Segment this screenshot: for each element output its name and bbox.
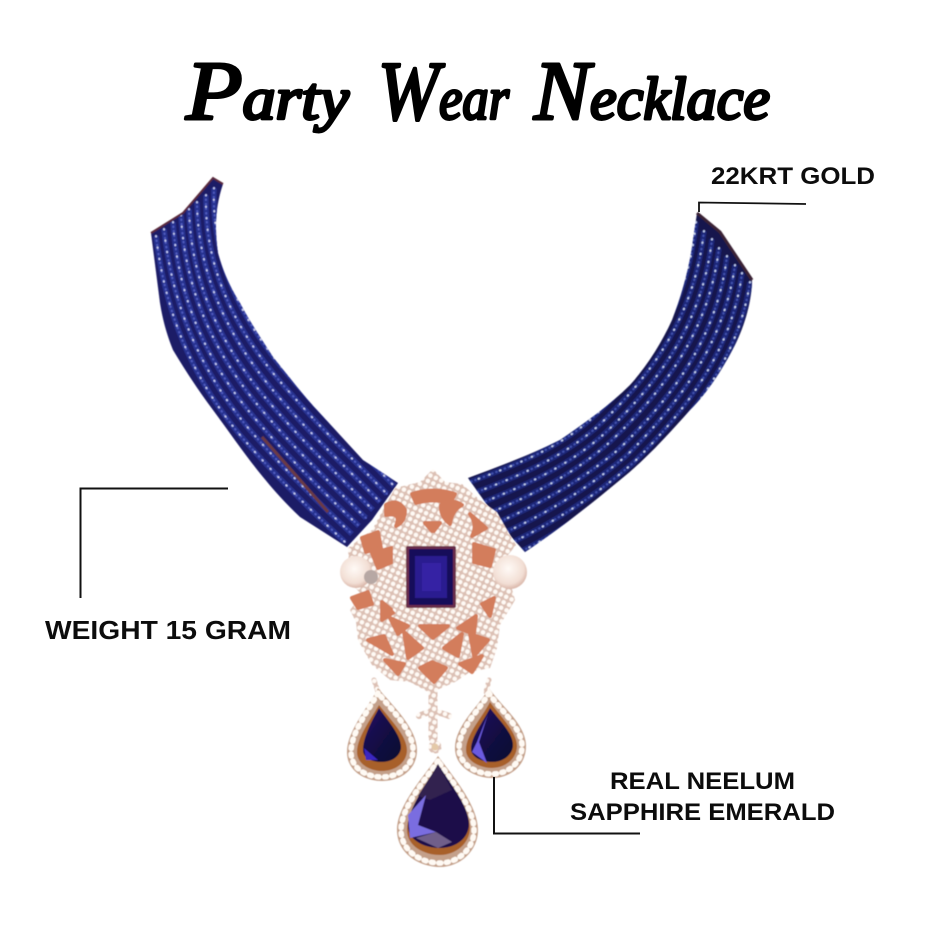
salmon openings in the filigree bbox=[352, 490, 494, 682]
left drop bbox=[347, 688, 417, 781]
callout: REAL NEELUM SAPPHIRE EMERALD bbox=[494, 768, 835, 834]
large drop bbox=[397, 756, 478, 867]
callout: WEIGHT 15 GRAM bbox=[45, 488, 291, 645]
title: Necklace bbox=[533, 45, 770, 138]
small connector bbox=[374, 680, 489, 752]
right bead strands bbox=[468, 213, 752, 552]
callout: 22KRT GOLD: 22KRT GOLD bbox=[711, 163, 875, 190]
centre pendant bbox=[340, 469, 527, 693]
right drop bbox=[455, 688, 526, 778]
callout: 22KRT GOLD bbox=[699, 163, 875, 212]
callout: WEIGHT 15 GRAM: WEIGHT 15 GRAM bbox=[45, 615, 291, 645]
necklace illustration bbox=[151, 178, 752, 867]
callout: REAL NEELUM SAPPHIRE EMERALD: REAL NEELUM bbox=[610, 768, 795, 795]
callout: REAL NEELUM SAPPHIRE EMERALD: SAPPHIRE EMERALD bbox=[570, 799, 835, 826]
title bbox=[185, 45, 770, 138]
centre halo bbox=[393, 533, 471, 622]
title: Party bbox=[185, 45, 349, 138]
centre emerald-cut gem bbox=[406, 546, 456, 608]
left bead strands bbox=[151, 178, 398, 547]
title: Wear bbox=[378, 45, 510, 138]
